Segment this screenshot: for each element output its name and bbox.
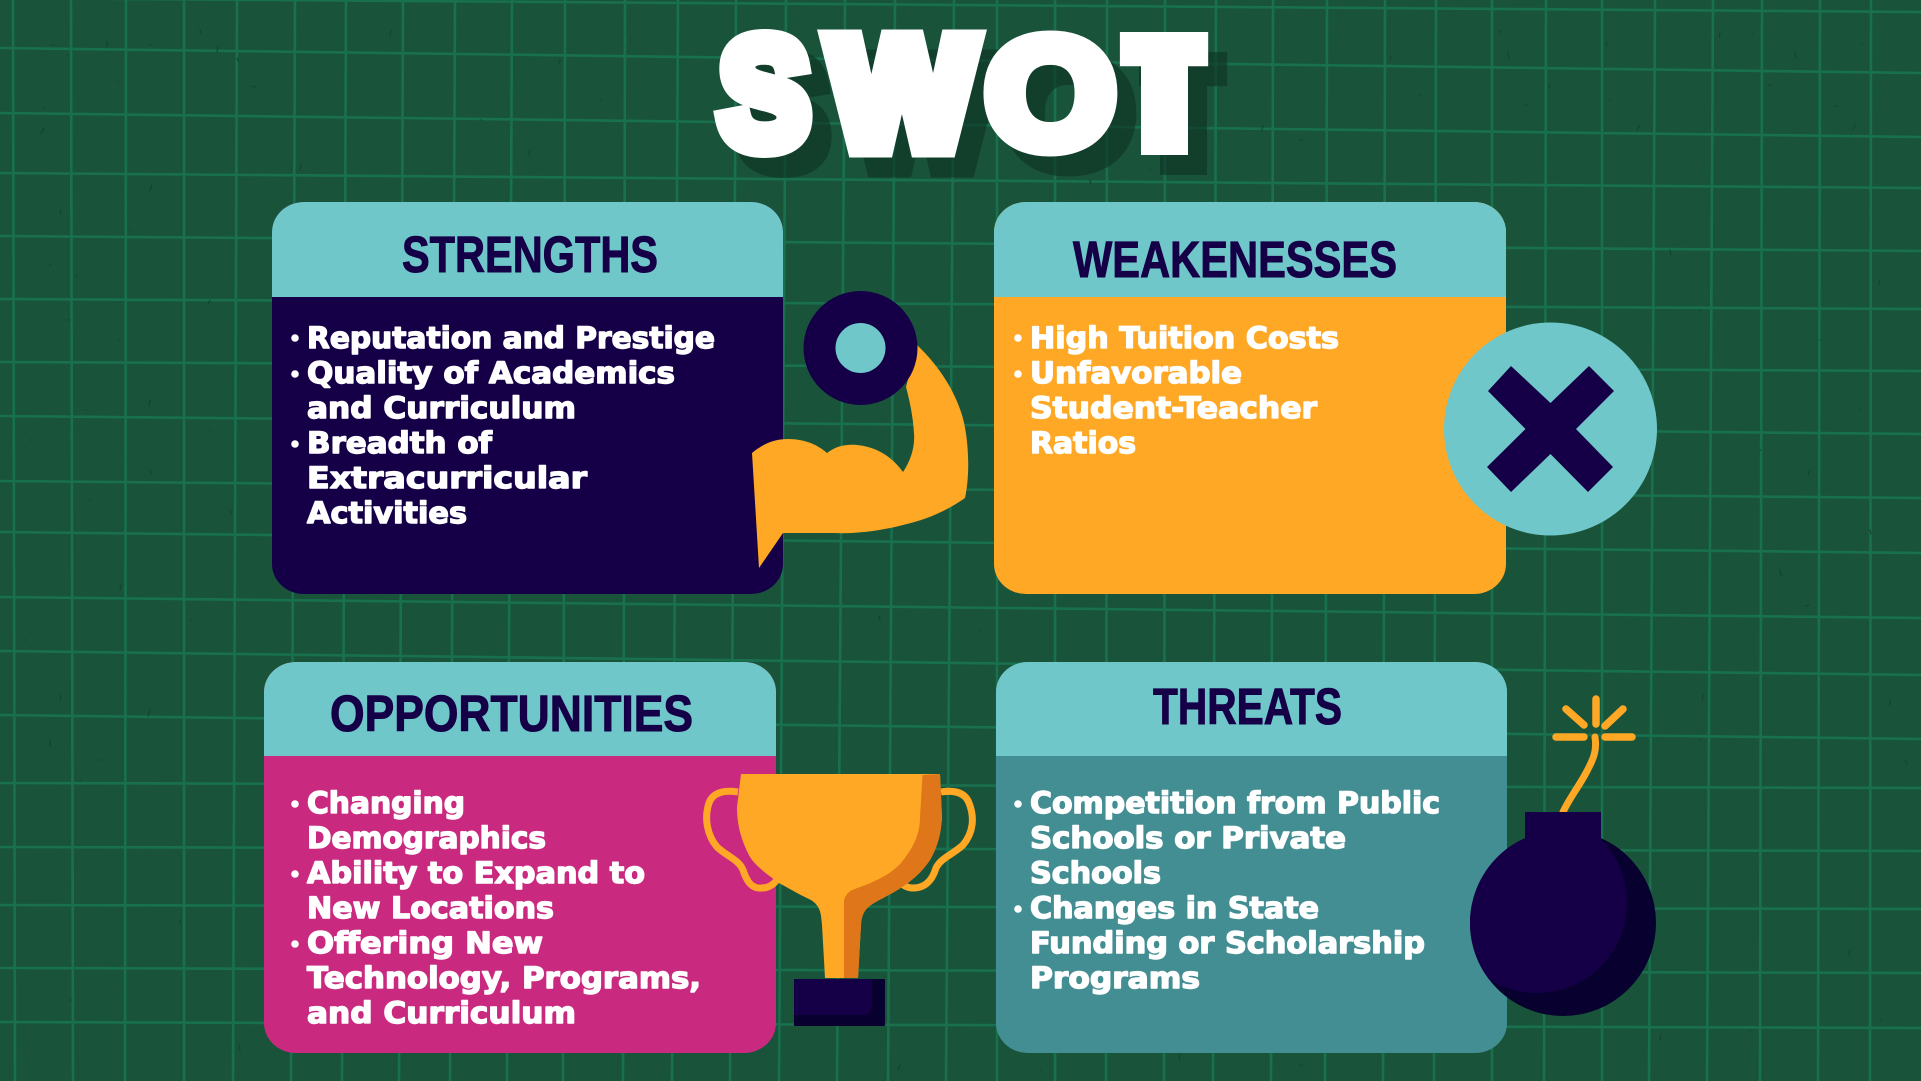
heading: opportunities: OPPORTUNITIES [330, 685, 693, 742]
base highlight [794, 979, 872, 1015]
opportunities list: and Curriculum [307, 996, 576, 1030]
threats list: Schools or Private [1030, 821, 1346, 855]
cup shading [844, 774, 942, 978]
heading: threats: THREATS [1153, 678, 1342, 735]
icon: flexed arm with dumbbell [752, 291, 968, 568]
opportunities body [264, 662, 776, 1053]
panel: weaknesses [994, 202, 1506, 594]
title: S [720, 7, 809, 180]
threats body [996, 662, 1507, 1053]
bomb main body [1470, 838, 1627, 993]
bomb shadow body [1470, 830, 1656, 1016]
threats list: Changes in State [1030, 891, 1319, 925]
weaknesses body [994, 202, 1506, 594]
opportunities list: Offering New [307, 926, 543, 960]
opportunities list: New Locations [307, 891, 554, 925]
panel: threats [996, 662, 1507, 1053]
trophy base [794, 979, 885, 1026]
weaknesses list: High Tuition Costs [1030, 321, 1339, 355]
heading: weakenesses: WEAKENESSES [1073, 231, 1397, 288]
strengths body [272, 202, 783, 594]
weaknesses list: Unfavorable [1030, 356, 1242, 390]
sparks [1556, 699, 1632, 737]
icon: bomb [1447, 699, 1656, 1016]
title: T [1125, 8, 1203, 179]
strengths list: Reputation and Prestige [307, 321, 715, 355]
weaknesses list: Student-Teacher [1030, 391, 1318, 425]
left handle [707, 791, 777, 888]
right handle [900, 791, 972, 888]
threats list: Funding or Scholarship [1030, 926, 1425, 960]
bomb neck [1525, 812, 1601, 848]
weaknesses header band [994, 202, 1506, 297]
threats list: Competition from Public [1030, 786, 1440, 820]
panel: opportunities [264, 662, 776, 1053]
title: O [986, 7, 1115, 179]
weaknesses list [1014, 321, 1339, 460]
strengths list [291, 321, 715, 530]
opportunities list: Changing [307, 786, 465, 820]
threats list [1014, 786, 1440, 995]
x mark [1487, 366, 1614, 492]
heading: strengths: STRENGTHS [402, 226, 658, 283]
strengths list: Extracurricular [307, 461, 588, 495]
fuse [1563, 737, 1596, 812]
opportunities list: Technology, Programs, [307, 961, 701, 995]
dumbbell [804, 291, 918, 405]
strengths list: Activities [307, 496, 467, 530]
dumbbell hole [836, 323, 886, 373]
strengths list: Breadth of [307, 426, 492, 460]
opportunities list [291, 786, 701, 1030]
icon: x mark in circle [1444, 322, 1657, 536]
strengths header band [272, 202, 783, 297]
title [720, 7, 1203, 180]
cup [737, 774, 942, 978]
weaknesses list: Ratios [1030, 426, 1136, 460]
icon: trophy [707, 774, 972, 1026]
panel: strengths [272, 202, 783, 594]
threats list: Programs [1030, 961, 1200, 995]
strengths list: and Curriculum [307, 391, 576, 425]
title: W [831, 8, 973, 180]
threats header band [996, 662, 1507, 756]
opportunities header band [264, 662, 776, 756]
threats list: Schools [1030, 856, 1161, 890]
opportunities list: Ability to Expand to [307, 856, 645, 890]
opportunities list: Demographics [307, 821, 546, 855]
strengths list: Quality of Academics [307, 356, 675, 390]
